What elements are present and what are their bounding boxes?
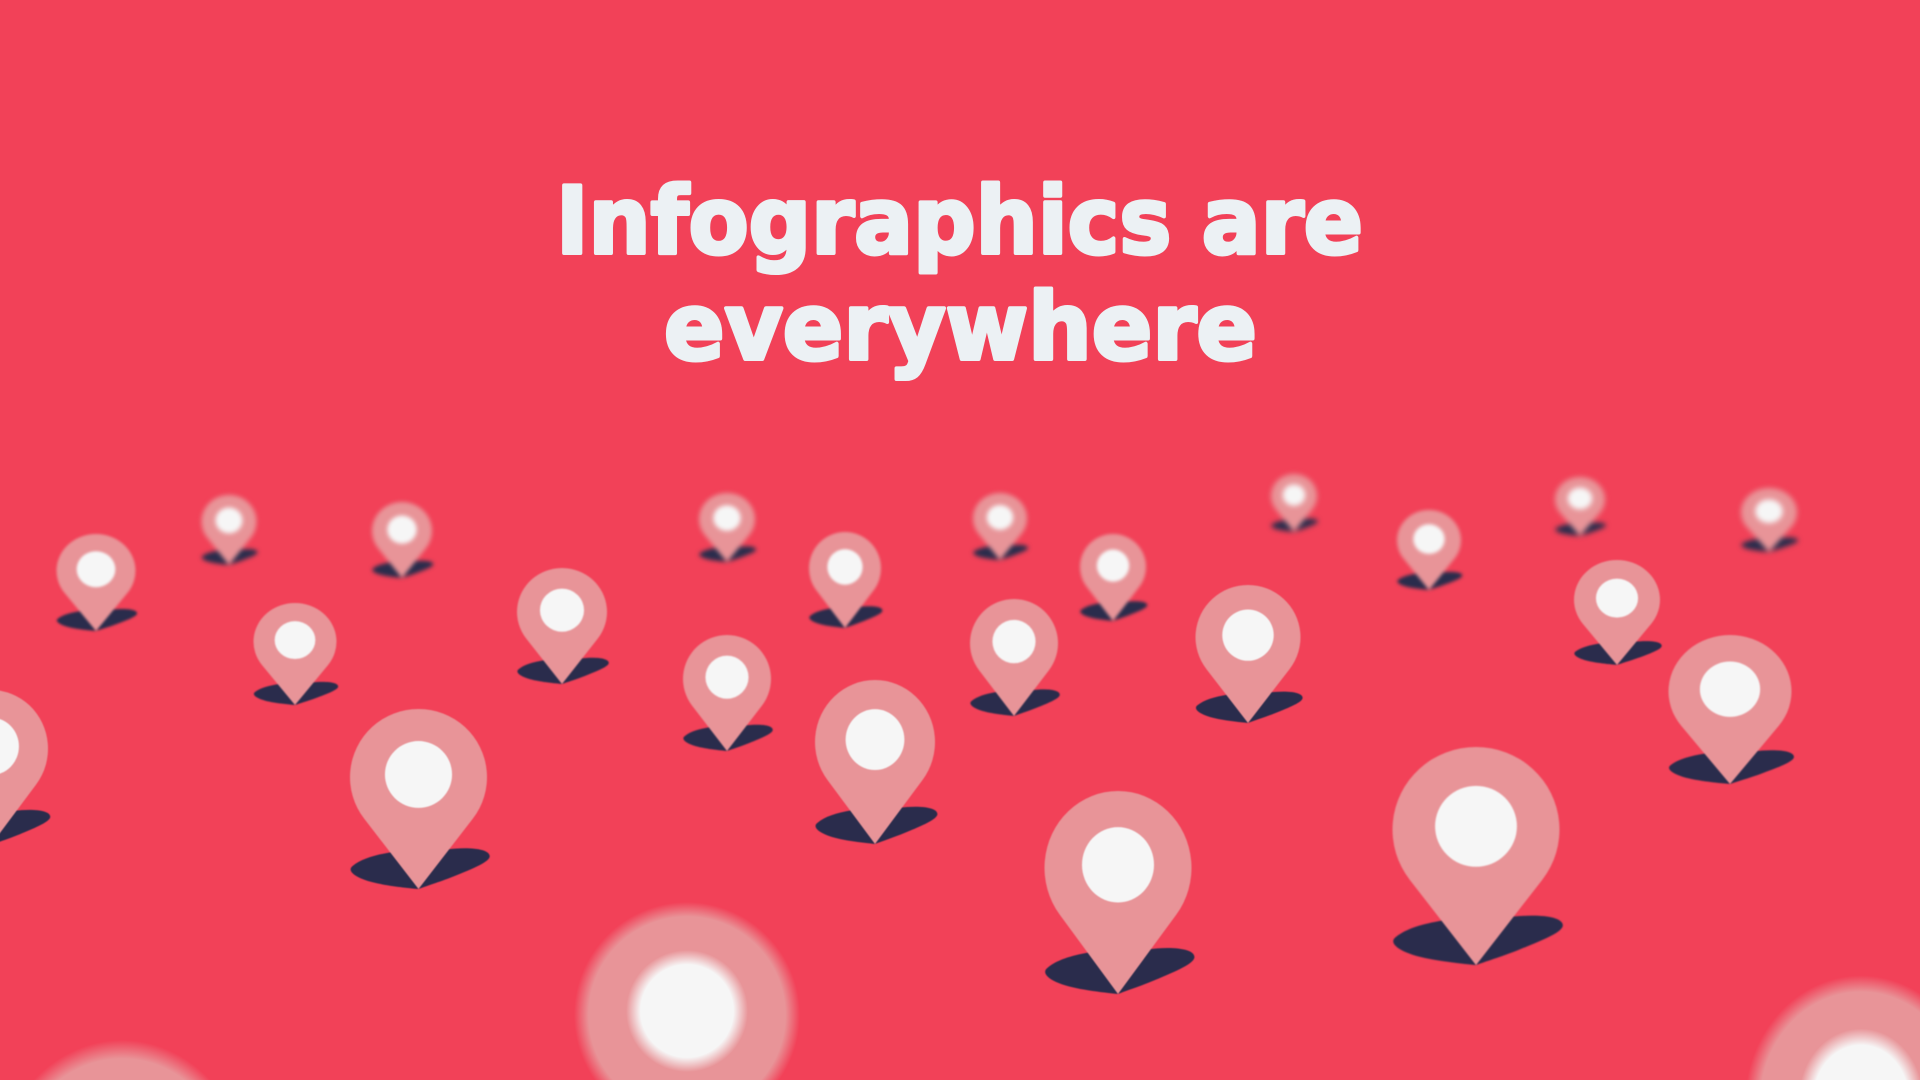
title: Infographics are <box>556 167 1363 275</box>
map pin: far row 3 <box>372 502 433 578</box>
map pin: middle row 4 <box>970 599 1060 716</box>
map pin: near row 4 <box>1392 747 1563 965</box>
map pin: middle row 1 <box>254 603 338 705</box>
map pin: far row 9 <box>1397 510 1462 590</box>
map pin: middle row 2 <box>517 568 609 684</box>
map pin: middle row 7 <box>1668 635 1794 784</box>
map pin: far row 2 <box>202 495 258 565</box>
map pin: far row 11 <box>1741 488 1798 552</box>
map pin: foreground blurred right <box>1741 968 1920 1080</box>
map pin: foreground blurred centre <box>569 897 805 1080</box>
map pin: far row 1 <box>56 534 137 631</box>
map pin: clipped at left edge <box>0 690 50 845</box>
map pin: middle row 3 <box>683 635 773 751</box>
map pin: far row 8 <box>1271 474 1318 532</box>
title: everywhere <box>664 273 1257 381</box>
map pin: far row 6 <box>973 493 1028 560</box>
map pin: foreground blurred left <box>0 1035 254 1080</box>
map pin: middle row 6 <box>1574 560 1662 665</box>
map pin: far row 5 <box>809 532 882 628</box>
title <box>556 167 1363 381</box>
map pin: near row 1 <box>350 709 490 889</box>
map pin: near row 2 <box>815 680 937 844</box>
map pin: far row 7 <box>1080 534 1147 621</box>
map pin: far row 4 <box>699 493 756 562</box>
map pin: near row 3 <box>1044 791 1194 994</box>
map pin: middle row 5 <box>1196 585 1303 723</box>
map pin: far row 10 <box>1555 477 1606 536</box>
